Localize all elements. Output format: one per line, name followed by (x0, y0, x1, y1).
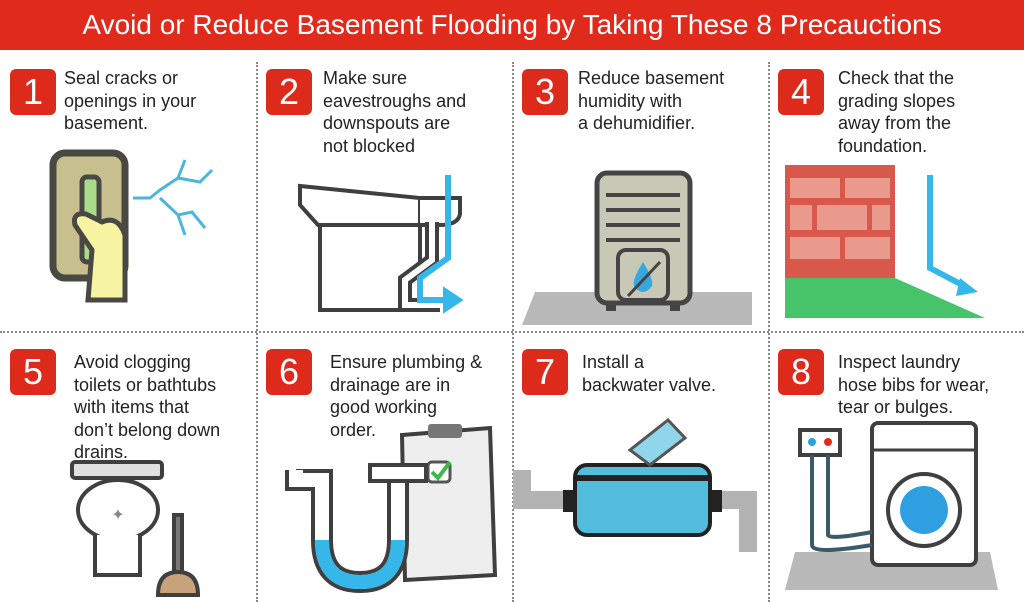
text 4 (838, 68, 955, 156)
text 8: hose bibs for wear, (838, 374, 989, 394)
text 8 (838, 352, 989, 417)
icon: dehumidifier (522, 173, 752, 325)
icon: trowel and crack (53, 153, 212, 300)
text 3: humidity with (578, 90, 682, 110)
text 5: don’t belong down (74, 420, 220, 440)
number 4 (778, 69, 824, 115)
text 7: Install a (582, 352, 644, 372)
panel 2 (266, 68, 466, 156)
panel 5 (10, 349, 220, 462)
text 1 (64, 68, 196, 133)
text 7: backwater valve. (582, 374, 716, 394)
number 3: 3 (535, 71, 555, 112)
text 8: Inspect laundry (838, 352, 960, 372)
text 4: foundation. (838, 136, 927, 156)
icon: washing machine (785, 423, 998, 590)
icon: toilet and plunger (72, 462, 198, 595)
title: Avoid or Reduce Basement Flooding by Taking These 8 Precauctions (82, 9, 942, 40)
number 7: 7 (535, 351, 555, 392)
text 3: a dehumidifier. (578, 113, 695, 133)
number 5: 5 (23, 351, 43, 392)
panel 3 (522, 68, 724, 133)
text 6: good working (330, 397, 437, 417)
text 5: drains. (74, 442, 128, 462)
number 8: 8 (791, 351, 811, 392)
number 6: 6 (279, 351, 299, 392)
panel 7 (522, 349, 716, 395)
text 6: Ensure plumbing & (330, 352, 482, 372)
number 3 (522, 69, 568, 115)
text 2 (323, 68, 466, 156)
number 2: 2 (279, 71, 299, 112)
panel 4 (778, 68, 955, 156)
icon: toilet and plunger: ✦ (111, 507, 125, 524)
text 8: tear or bulges. (838, 397, 953, 417)
text 5: toilets or bathtubs (74, 374, 216, 394)
icon: backwater valve (522, 420, 748, 552)
number 4: 4 (791, 71, 811, 112)
text 6 (330, 352, 482, 440)
text 5 (74, 352, 220, 462)
number 6 (266, 349, 312, 395)
text 4: grading slopes (838, 90, 955, 110)
icon: pipe and checklist (296, 424, 495, 582)
number 7 (522, 349, 568, 395)
text 2: not blocked (323, 136, 415, 156)
text 2: downspouts are (323, 113, 450, 133)
text 6: drainage are in (330, 374, 450, 394)
panel 1 (10, 68, 196, 133)
text 3 (578, 68, 724, 133)
text 1: openings in your (64, 90, 196, 110)
text 4: Check that the (838, 68, 954, 88)
text 4: away from the (838, 113, 951, 133)
text 1: Seal cracks or (64, 68, 178, 88)
text 3: Reduce basement (578, 68, 724, 88)
text 5: Avoid clogging (74, 352, 191, 372)
number 5 (10, 349, 56, 395)
number 2 (266, 69, 312, 115)
text 6: order. (330, 420, 376, 440)
number 8 (778, 349, 824, 395)
text 5: with items that (74, 397, 189, 417)
text 1: basement. (64, 113, 148, 133)
icon: gutter and downspout (300, 175, 460, 310)
number 1: 1 (23, 71, 43, 112)
icon: brick wall and grading (785, 165, 985, 318)
number 1 (10, 69, 56, 115)
text 7 (582, 352, 716, 394)
title (0, 0, 1024, 50)
panel 6 (266, 349, 482, 440)
panel 8 (778, 349, 989, 417)
text 2: eavestroughs and (323, 90, 466, 110)
text 2: Make sure (323, 68, 407, 88)
